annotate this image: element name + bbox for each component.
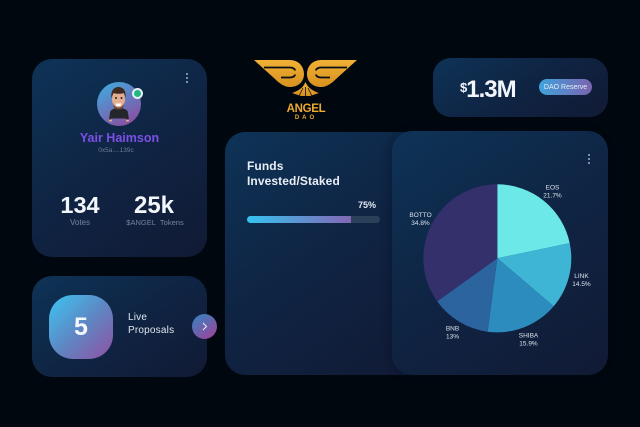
stat: tokens: 25k bbox=[134, 192, 174, 219]
logo: Angel DAO bbox=[254, 60, 357, 121]
stat: votes: 134 bbox=[60, 192, 100, 218]
text: DAO wordmark: DAO bbox=[295, 115, 317, 121]
icon: arrow button bbox=[192, 314, 217, 339]
slice: LINK bbox=[497, 243, 571, 306]
bar: progress fill bbox=[247, 216, 351, 223]
text: proposal count: 5 bbox=[74, 313, 88, 341]
label: LINK: LINK bbox=[574, 273, 589, 280]
stat: tokens: $ANGEL Tokens bbox=[126, 218, 184, 227]
heading: funds invested: Funds bbox=[247, 159, 284, 173]
label: BOTTO: 34.8% bbox=[411, 220, 430, 227]
slice: SHIBA bbox=[488, 258, 554, 332]
badge: DAO reserve bbox=[539, 79, 592, 95]
stat: tokens bbox=[126, 192, 184, 227]
icon: avatar bbox=[97, 82, 141, 126]
slice: BNB bbox=[437, 258, 497, 332]
text: ANGEL wordmark: ANGEL bbox=[287, 103, 325, 115]
icon: proposal count tile bbox=[49, 295, 113, 359]
slice: BOTTO bbox=[423, 184, 497, 301]
heading: profile name: Yair Haimson bbox=[80, 131, 159, 145]
panel: live proposals bbox=[32, 276, 207, 377]
label: BNB: 13% bbox=[446, 334, 459, 340]
label: BNB: BNB bbox=[446, 326, 459, 332]
label: SHIBA: 15.9% bbox=[519, 340, 538, 348]
label: LINK: 14.5% bbox=[572, 281, 591, 288]
label: EOS: EOS bbox=[546, 184, 560, 192]
text: live proposals label bbox=[128, 312, 174, 336]
label: BOTTO: BOTTO bbox=[409, 212, 432, 219]
slice: EOS bbox=[497, 184, 570, 258]
panel: allocation pie bbox=[392, 131, 608, 375]
icon: golden wings bbox=[254, 60, 357, 96]
label: EOS: 21.7% bbox=[543, 192, 562, 200]
chart: pie bbox=[409, 184, 591, 348]
stat: votes: Votes bbox=[70, 218, 90, 227]
text: live proposals label: Proposals bbox=[128, 324, 174, 336]
heading: funds invested: Invested/Staked bbox=[247, 174, 340, 188]
text: progress percent: 75% bbox=[358, 200, 376, 210]
panel: DAO reserve bbox=[433, 58, 608, 117]
chart: progress bar bbox=[247, 216, 380, 223]
badge: DAO reserve: DAO Reserve bbox=[544, 84, 587, 91]
stat: reserve amount: $1.3M bbox=[460, 76, 516, 103]
panel: profile card bbox=[32, 59, 207, 257]
text: wallet address: 0x5a....139c bbox=[98, 147, 134, 154]
icon: pie menu dots bbox=[588, 154, 590, 164]
icon: online status bbox=[132, 88, 143, 99]
icon: profile menu dots bbox=[186, 73, 188, 83]
panel: funds invested bbox=[225, 132, 425, 375]
heading: funds invested bbox=[247, 159, 340, 188]
label: SHIBA: SHIBA bbox=[519, 332, 539, 340]
text: live proposals label: Live bbox=[128, 312, 147, 323]
